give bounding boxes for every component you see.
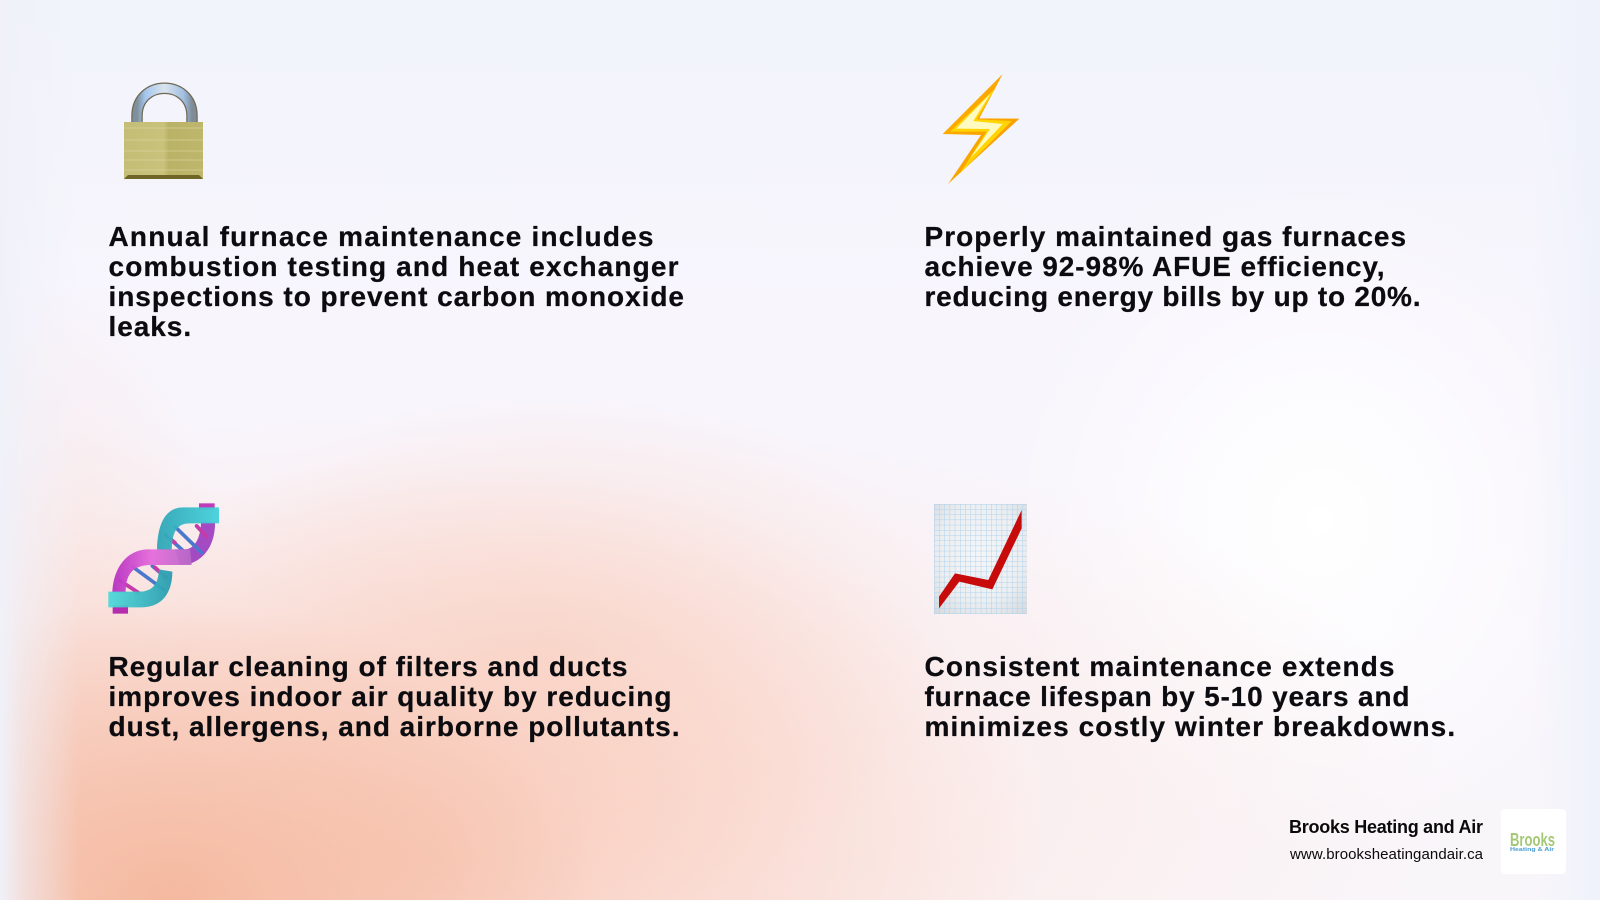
text: air quality: dust, allergens, and airborne pollutants.: [108, 711, 680, 742]
text: lifespan: furnace lifespan by 5-10 years and: [924, 681, 1410, 712]
text: annual maintenance: inspections to prevent carbon monoxide: [108, 281, 684, 312]
text: furnace efficiency: achieve 92-98% AFUE efficiency,: [924, 251, 1384, 282]
text: annual maintenance: leaks.: [108, 311, 191, 342]
text: lifespan: [924, 651, 1455, 742]
text: air quality: [108, 651, 680, 742]
text: furnace efficiency: [924, 221, 1420, 312]
logo: [1501, 809, 1566, 874]
icon: rising chart: [934, 504, 1027, 614]
logo: Heating & Air: [1510, 847, 1555, 853]
icon: padlock: [124, 88, 203, 179]
text: annual maintenance: [108, 221, 684, 342]
text: furnace efficiency: Properly maintained gas furnaces: [924, 221, 1406, 252]
text: annual maintenance: Annual furnace maintenance includes: [108, 221, 654, 252]
text: air quality: Regular cleaning of filters and ducts: [108, 651, 628, 682]
logo: Brooks: [1510, 830, 1555, 850]
footer: brand name and website: [1289, 817, 1484, 863]
text: annual maintenance: combustion testing and heat exchanger: [108, 251, 679, 282]
icon: dna helix: [108, 503, 219, 614]
text: furnace efficiency: reducing energy bills by up to 20%.: [924, 281, 1420, 312]
footer: brand name and website: Brooks Heating and Air: [1289, 817, 1483, 837]
icon: lightning bolt: [943, 74, 1019, 184]
text: lifespan: minimizes costly winter breakdowns.: [924, 711, 1455, 742]
text: lifespan: Consistent maintenance extends: [924, 651, 1394, 682]
text: air quality: improves indoor air quality by reducing: [108, 681, 672, 712]
footer: brand name and website: www.brooksheatingandair.ca: [1289, 846, 1484, 863]
